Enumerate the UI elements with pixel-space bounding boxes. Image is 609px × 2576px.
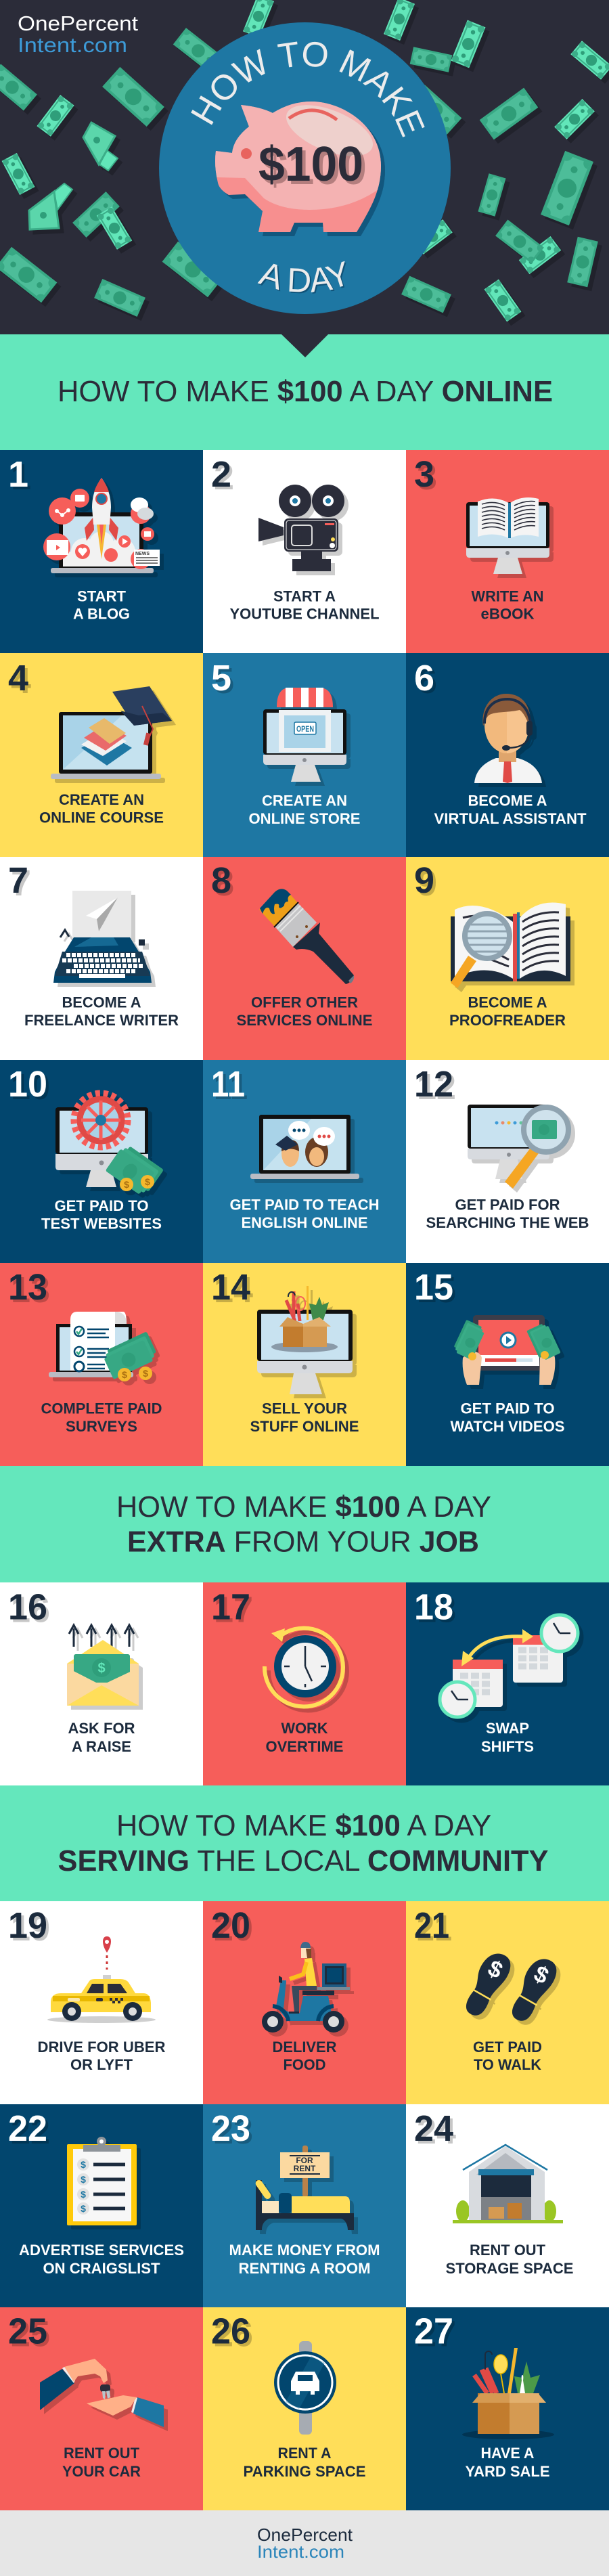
tile 8: offer other services online: SERVICES ONLINE bbox=[237, 1012, 372, 1029]
tile 27: have a yard sale bbox=[406, 2307, 609, 2510]
tile 7: become a freelance writer: FREELANCE WRITER bbox=[24, 1012, 179, 1029]
footer with logo: Intent.com bbox=[257, 2541, 344, 2562]
heading band: extra from your job bbox=[0, 1466, 609, 1582]
tile 4: create an online course: 4 bbox=[8, 658, 28, 698]
tile 22: advertise services on craigslist bbox=[0, 2104, 203, 2307]
tile 16: ask for a raise: A RAISE bbox=[72, 1738, 131, 1755]
tile 13: complete paid surveys: 13 bbox=[8, 1267, 47, 1308]
tile 10: get paid to test websites: TEST WEBSITES bbox=[41, 1216, 162, 1232]
icon: survey checklist and cash: $ bbox=[122, 1369, 127, 1380]
label: WRITE AN bbox=[471, 587, 544, 605]
icon: bed with for-rent sign: RENT bbox=[294, 2164, 316, 2173]
tile 23: make money from renting a room: RENTING A ROOM bbox=[238, 2260, 371, 2277]
tile 7: become a freelance writer: 7 bbox=[8, 860, 28, 901]
label: DRIVE FOR UBER bbox=[38, 2039, 166, 2056]
tile 23: make money from renting a room: 23 bbox=[211, 2108, 250, 2149]
tile 3: write an ebook bbox=[406, 450, 609, 653]
label: START A bbox=[273, 587, 336, 605]
tile 2: start a youtube channel bbox=[203, 450, 406, 653]
label: ADVERTISE SERVICES bbox=[19, 2242, 184, 2259]
tile 9: become a proofreader: 9 bbox=[414, 860, 434, 901]
label: RENT OUT bbox=[470, 2242, 546, 2259]
tile 17: work overtime bbox=[203, 1582, 406, 1785]
icon: calendars and clocks with arrow bbox=[440, 1615, 578, 1717]
tile 25: rent out your car: YOUR CAR bbox=[62, 2463, 141, 2480]
tile 27: have a yard sale: YARD SALE bbox=[466, 2463, 549, 2480]
label: CREATE AN bbox=[59, 791, 144, 808]
tile 24: rent out storage space: 24 bbox=[414, 2108, 453, 2149]
tile 12: get paid for searching the web: 12 bbox=[414, 1064, 453, 1105]
label: GET PAID bbox=[473, 2039, 542, 2056]
tile 3: write an ebook: 3 bbox=[414, 454, 434, 495]
tile 12: get paid for searching the web: SEARCHING THE WEB bbox=[426, 1214, 589, 1231]
tile 18: swap shifts bbox=[406, 1582, 609, 1785]
tile 4: create an online course: ONLINE COURSE bbox=[39, 809, 164, 826]
footer with logo: OnePercent bbox=[257, 2525, 353, 2545]
curved title: how to make: HOW TO MAKE bbox=[191, 42, 425, 137]
tile 19: drive for uber or lyft: OR LYFT bbox=[70, 2056, 133, 2073]
icon: clipboard with list: $ bbox=[81, 2159, 86, 2170]
tile 6: become a virtual assistant: VIRTUAL ASSISTANT bbox=[434, 810, 587, 827]
tile 5: create an online store bbox=[203, 653, 406, 857]
tile 5: create an online store: 5 bbox=[211, 658, 231, 698]
tile 1: start a blog: A BLOG bbox=[73, 605, 130, 623]
tile 6: become a virtual assistant bbox=[406, 653, 609, 857]
icon: clipboard with list: $ bbox=[81, 2174, 86, 2185]
heading band: extra from your job: HOW TO MAKE $100 A DAY bbox=[116, 1490, 491, 1524]
tile 26: rent a parking space: 26 bbox=[211, 2311, 250, 2351]
label: RENT A bbox=[277, 2445, 332, 2462]
tile 19: drive for uber or lyft bbox=[0, 1901, 203, 2104]
circle badge bbox=[159, 22, 451, 314]
tile 15: get paid to watch videos: WATCH VIDEOS bbox=[451, 1418, 564, 1435]
tile 11: get paid to teach english online bbox=[203, 1060, 406, 1263]
icon: typewriter with paper plane bbox=[53, 891, 152, 983]
icon: piggy bank bbox=[215, 102, 385, 236]
label: GET PAID FOR bbox=[455, 1197, 560, 1213]
tile 25: rent out your car bbox=[0, 2307, 203, 2510]
icon: laptop with video call bbox=[250, 1115, 359, 1179]
tile 12: get paid for searching the web bbox=[406, 1060, 609, 1263]
tile 21: get paid to walk: TO WALK bbox=[474, 2056, 541, 2073]
icon: monitor with magnifier and cash bbox=[468, 1105, 568, 1189]
label: BECOME A bbox=[468, 994, 547, 1011]
tile 22: advertise services on craigslist: ON CRAIGSLIST bbox=[43, 2260, 160, 2277]
tile 21: get paid to walk: 21 bbox=[414, 1905, 449, 1946]
label: BECOME A bbox=[62, 994, 141, 1011]
icon: person with headset bbox=[474, 694, 542, 783]
icon: monitor, gear and cash: $ bbox=[145, 1176, 150, 1187]
label: SELL YOUR bbox=[262, 1400, 347, 1417]
tile 20: deliver food: 20 bbox=[211, 1905, 250, 1946]
tile 21: get paid to walk bbox=[406, 1901, 609, 2104]
icon: shoe soles with dollar signs bbox=[460, 1948, 561, 2026]
icon: box of yard sale items bbox=[462, 2348, 554, 2439]
tile 22: advertise services on craigslist: 22 bbox=[8, 2108, 47, 2149]
icon: storage unit building bbox=[453, 2145, 563, 2223]
icon: rocket and laptop: NEWS bbox=[135, 552, 150, 556]
icon: laptop with books and graduation cap bbox=[51, 686, 172, 779]
icon: clipboard with list bbox=[67, 2137, 137, 2225]
tile 1: start a blog bbox=[0, 450, 203, 653]
icon: monitor with box of items bbox=[257, 1286, 353, 1394]
tile 14: sell your stuff online: 14 bbox=[211, 1267, 250, 1308]
tile 20: deliver food bbox=[203, 1901, 406, 2104]
tile 8: offer other services online: 8 bbox=[211, 860, 231, 901]
heading band: serving the local community bbox=[0, 1785, 609, 1901]
icon: bed with for-rent sign: FOR bbox=[296, 2156, 313, 2165]
tile 3: write an ebook: eBOOK bbox=[480, 605, 535, 623]
icon: paint brush bbox=[259, 889, 354, 984]
tile 18: swap shifts: 18 bbox=[414, 1586, 453, 1627]
icon: book on monitor bbox=[466, 497, 549, 574]
icon: open book with magnifier bbox=[451, 903, 570, 988]
tile 25: rent out your car: 25 bbox=[8, 2311, 47, 2351]
label: START bbox=[77, 587, 127, 605]
tile 26: rent a parking space: PARKING SPACE bbox=[244, 2463, 365, 2480]
label: RENT OUT bbox=[64, 2445, 140, 2462]
icon: rocket and laptop bbox=[43, 478, 160, 573]
heading band: online: HOW TO MAKE $100 A DAY ONLINE bbox=[58, 375, 553, 408]
label: GET PAID TO bbox=[460, 1400, 555, 1417]
icon: delivery scooter bbox=[262, 1942, 350, 2033]
tile 9: become a proofreader bbox=[406, 857, 609, 1060]
icon: envelope with cash and arrows: $ bbox=[97, 1661, 106, 1676]
tile 11: get paid to teach english online: ENGLISH ONLINE bbox=[241, 1214, 368, 1231]
tile 15: get paid to watch videos bbox=[406, 1263, 609, 1466]
label: CREATE AN bbox=[262, 792, 347, 809]
tile 4: create an online course bbox=[0, 653, 203, 857]
label: MAKE MONEY FROM bbox=[229, 2242, 380, 2259]
tile 14: sell your stuff online bbox=[203, 1263, 406, 1466]
tile 27: have a yard sale: 27 bbox=[414, 2311, 453, 2351]
label: OFFER OTHER bbox=[251, 994, 358, 1011]
tile 13: complete paid surveys: SURVEYS bbox=[66, 1418, 137, 1435]
icon: hands passing car keys bbox=[40, 2359, 164, 2427]
icon: tablet held with cash bbox=[452, 1315, 561, 1385]
tile 23: make money from renting a room bbox=[203, 2104, 406, 2307]
tile 13: complete paid surveys bbox=[0, 1263, 203, 1466]
tile 16: ask for a raise: 16 bbox=[8, 1586, 47, 1627]
tile 24: rent out storage space bbox=[406, 2104, 609, 2307]
$100 amount: $100 bbox=[258, 137, 363, 192]
label: BECOME A bbox=[468, 792, 547, 809]
tile 10: get paid to test websites: 10 bbox=[8, 1064, 47, 1105]
icon: storefront on monitor: OPEN bbox=[296, 724, 314, 734]
label: GET PAID TO bbox=[54, 1197, 149, 1214]
tile 2: start a youtube channel: YOUTUBE CHANNEL bbox=[230, 605, 379, 623]
hero banner bbox=[0, 0, 609, 334]
heading band: extra from your job: EXTRA FROM YOUR JOB bbox=[127, 1526, 479, 1558]
icon: survey checklist and cash: $ bbox=[143, 1368, 148, 1379]
icon: envelope with cash and arrows bbox=[67, 1625, 139, 1706]
logo: OnePercent bbox=[18, 12, 138, 35]
tile 5: create an online store: ONLINE STORE bbox=[249, 810, 360, 827]
tile 18: swap shifts: SHIFTS bbox=[481, 1738, 534, 1755]
footer with logo bbox=[0, 2510, 609, 2576]
icon: clipboard with list: $ bbox=[81, 2189, 86, 2200]
label: DELIVER bbox=[272, 2039, 337, 2056]
falling money bills bbox=[0, 0, 609, 321]
logo bbox=[18, 12, 138, 57]
label: SWAP bbox=[486, 1720, 529, 1737]
curved title: a day: A DAY bbox=[257, 261, 346, 294]
tile 16: ask for a raise bbox=[0, 1582, 203, 1785]
tile 17: work overtime: 17 bbox=[211, 1586, 250, 1627]
label: ASK FOR bbox=[68, 1720, 135, 1737]
icon: clock with overtime arrow bbox=[265, 1628, 343, 1706]
icon: shoe soles with dollar signs: $ bbox=[530, 1961, 553, 1989]
tile 20: deliver food: FOOD bbox=[283, 2056, 326, 2073]
icon: taxi with map pin bbox=[47, 1936, 156, 2023]
tile 2: start a youtube channel: 2 bbox=[211, 454, 231, 495]
heading band: serving the local community: SERVING THE LOCAL COMMUNITY bbox=[58, 1844, 548, 1878]
tile 17: work overtime: OVERTIME bbox=[265, 1738, 344, 1755]
tile 14: sell your stuff online: STUFF ONLINE bbox=[250, 1418, 359, 1435]
tile 7: become a freelance writer bbox=[0, 857, 203, 1060]
icon: monitor, gear and cash: $ bbox=[124, 1179, 129, 1190]
icon: bed with for-rent sign bbox=[254, 2146, 354, 2230]
icon: parking sign bbox=[274, 2341, 336, 2435]
icon: storefront on monitor bbox=[263, 688, 346, 782]
tile 24: rent out storage space: STORAGE SPACE bbox=[445, 2260, 574, 2277]
icon: film camera bbox=[258, 485, 344, 571]
tile 15: get paid to watch videos: 15 bbox=[414, 1267, 453, 1308]
tile 1: start a blog: 1 bbox=[8, 454, 28, 495]
icon: shoe soles with dollar signs: $ bbox=[484, 1955, 507, 1984]
label: HAVE A bbox=[480, 2445, 535, 2462]
tile 6: become a virtual assistant: 6 bbox=[414, 658, 434, 698]
tile 8: offer other services online bbox=[203, 857, 406, 1060]
label: COMPLETE PAID bbox=[41, 1400, 162, 1417]
icon: clipboard with list: $ bbox=[81, 2203, 86, 2214]
icon: monitor, gear and cash bbox=[55, 1093, 164, 1198]
logo: Intent.com bbox=[18, 33, 127, 57]
label: WORK bbox=[281, 1720, 328, 1737]
tile 9: become a proofreader: PROOFREADER bbox=[449, 1012, 566, 1029]
label: GET PAID TO TEACH bbox=[230, 1197, 379, 1213]
icon: survey checklist and cash bbox=[49, 1312, 159, 1381]
tile 19: drive for uber or lyft: 19 bbox=[8, 1905, 47, 1946]
tile 10: get paid to test websites bbox=[0, 1060, 203, 1263]
heading band: online bbox=[0, 334, 609, 451]
heading band: serving the local community: HOW TO MAKE $100 A DAY bbox=[116, 1809, 491, 1842]
tile 11: get paid to teach english online: 11 bbox=[211, 1064, 245, 1105]
tile 26: rent a parking space bbox=[203, 2307, 406, 2510]
